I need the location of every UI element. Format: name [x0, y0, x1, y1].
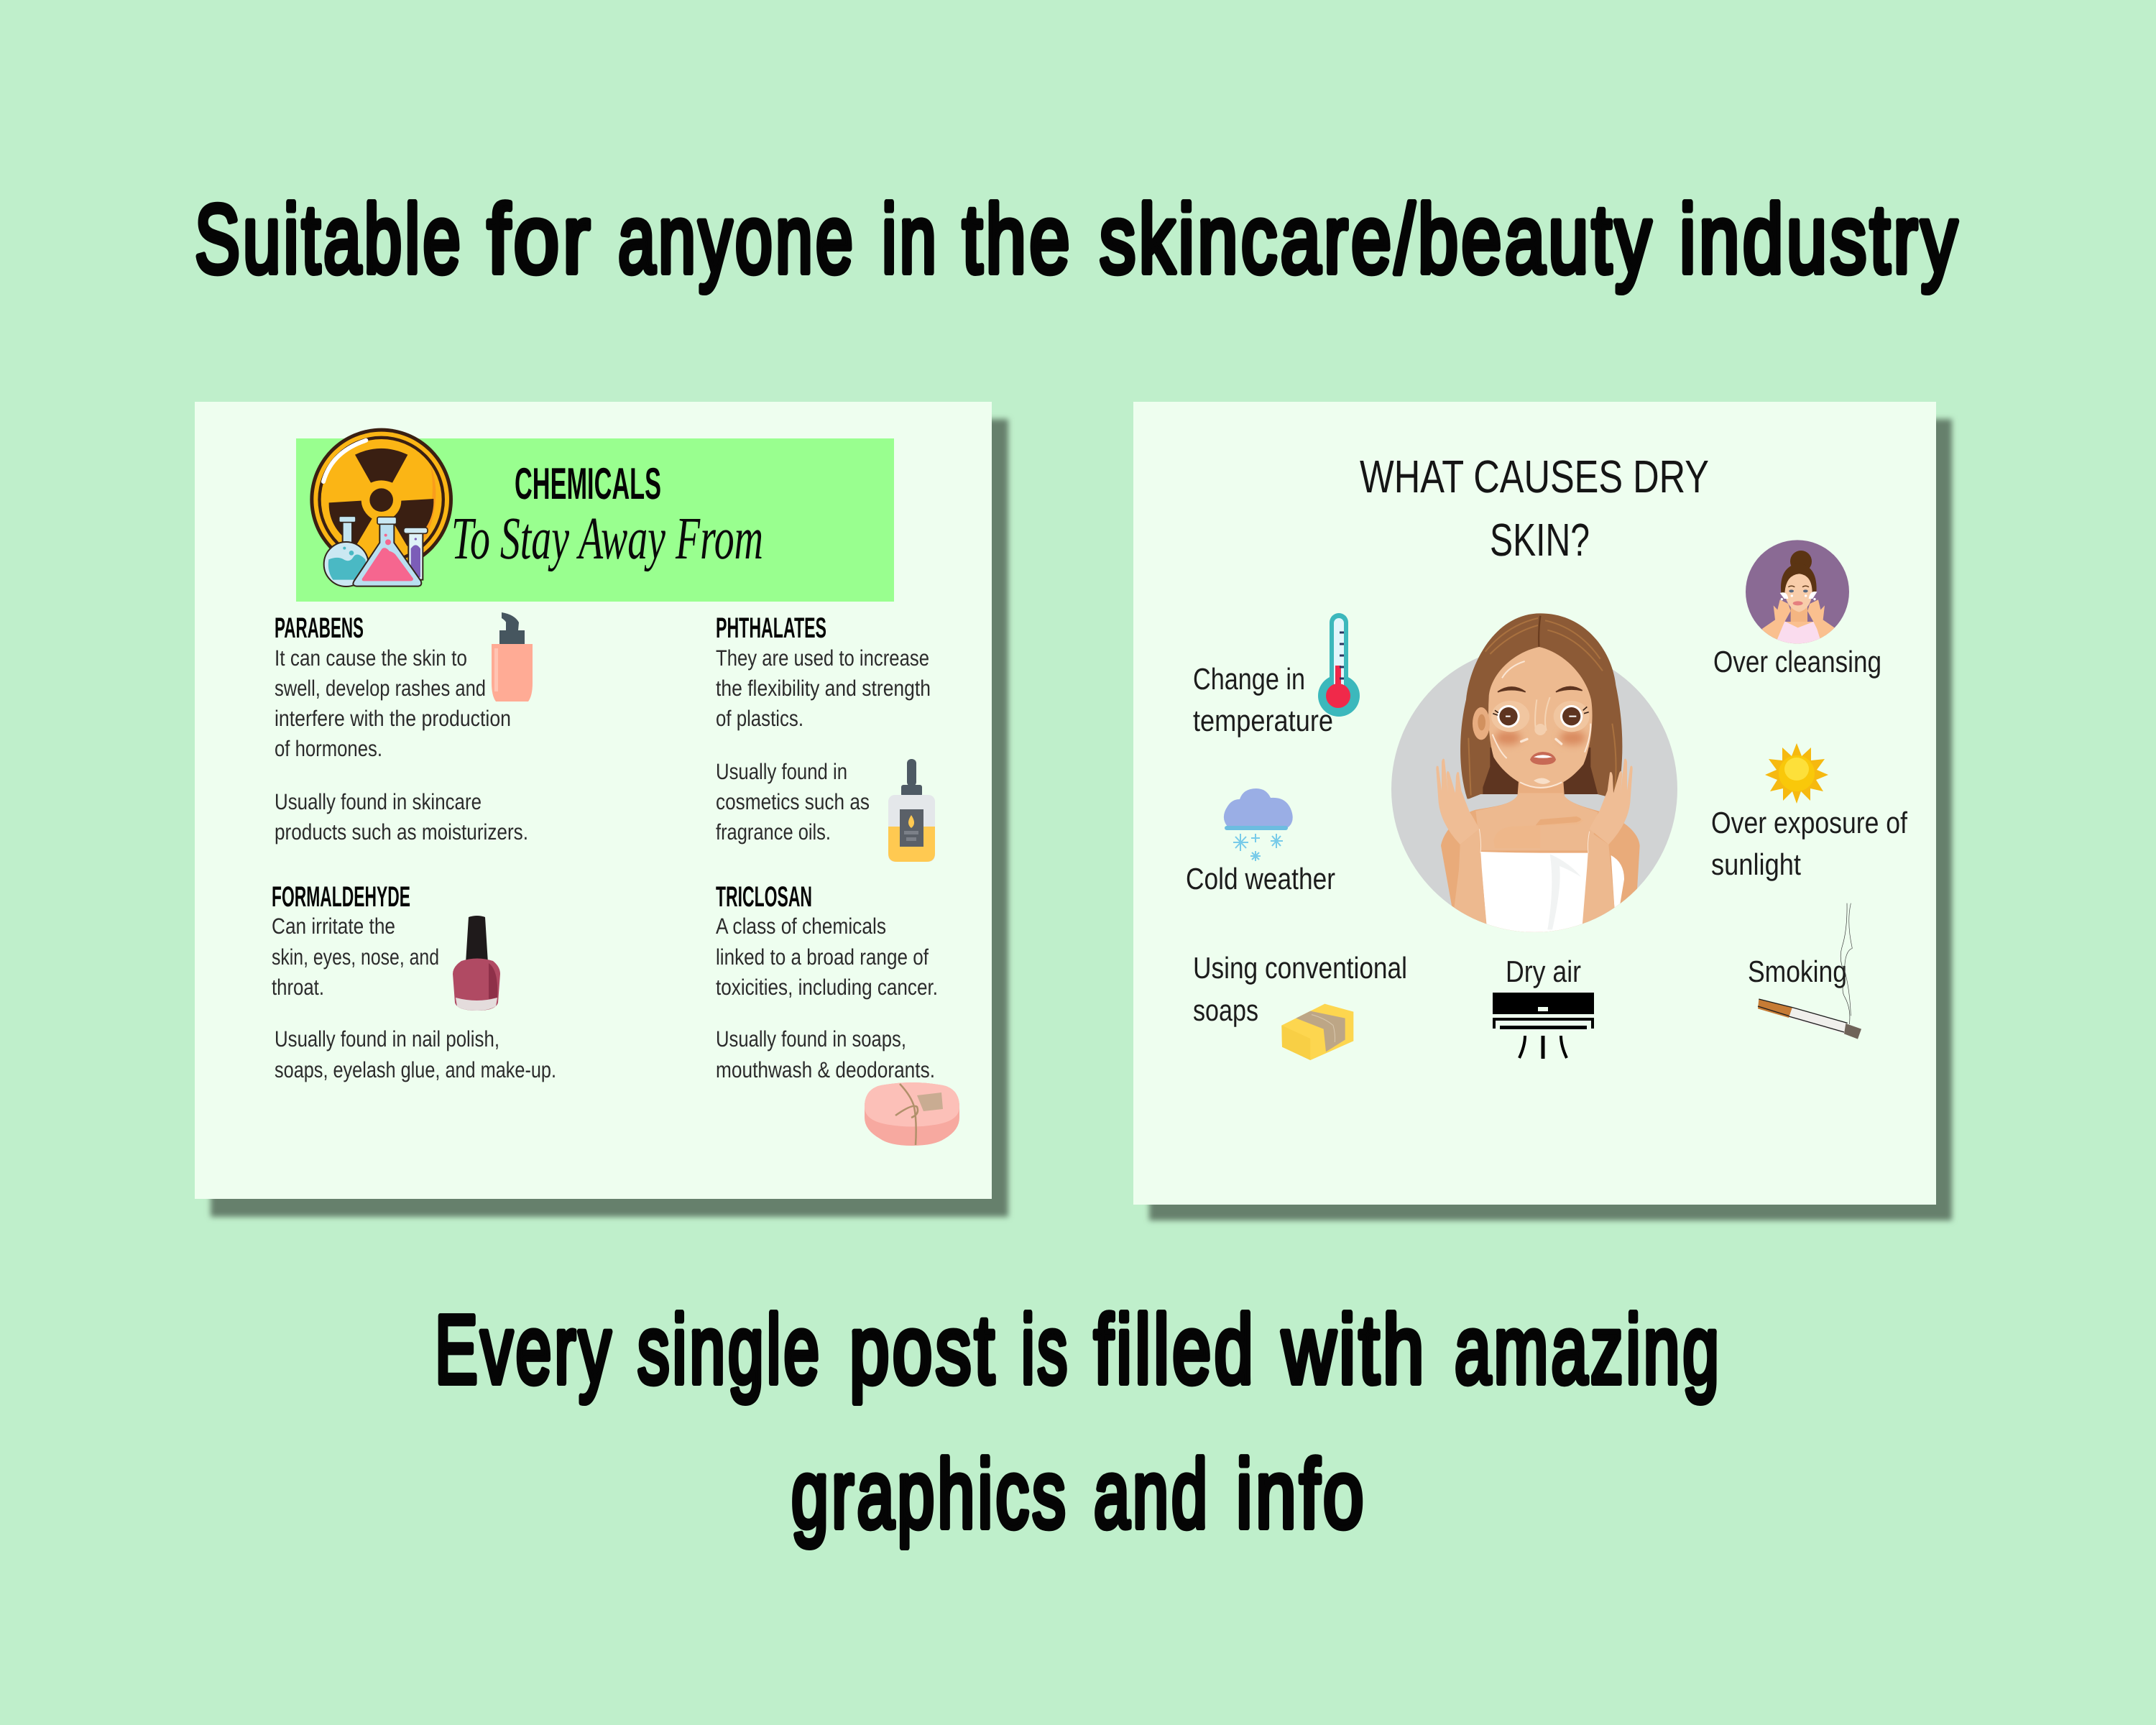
- label with icon: using conventional soaps: Using conventional: [1193, 951, 1407, 985]
- bottom heading: post: [849, 1295, 998, 1404]
- label with icon: smoking: Smoking: [1748, 954, 1847, 988]
- icon: sun: [1765, 743, 1828, 804]
- banner: chemicals title: [296, 438, 894, 602]
- text block: formaldehyde: Can irritate the: [272, 914, 395, 939]
- label with icon: over cleansing: [1713, 540, 1881, 678]
- label with icon: cold weather: Cold weather: [1186, 862, 1335, 896]
- icon: woman cleansing face: [1746, 540, 1849, 645]
- top heading: Suitable: [195, 185, 464, 293]
- icon: nail polish: [453, 916, 500, 1011]
- banner: chemicals title: To Stay Away From: [451, 505, 763, 572]
- text block: triclosan: Usually found in soaps,: [716, 1026, 906, 1052]
- text block: formaldehyde: throat.: [272, 975, 324, 1000]
- label with icon: change in temperature: Change in: [1193, 662, 1305, 696]
- text block: parabens: products such as moisturizers.: [275, 819, 528, 845]
- top heading: [195, 185, 1961, 293]
- bottom heading: is: [1021, 1295, 1070, 1404]
- text block: triclosan: A class of chemicals: [716, 914, 886, 939]
- top heading: the: [962, 185, 1073, 293]
- top heading: for: [487, 185, 594, 293]
- bottom heading: amazing: [1455, 1295, 1722, 1404]
- icon: cigarette with smoke: [1758, 903, 1861, 1039]
- icon: dropper bottle: [888, 759, 935, 862]
- panel: what causes dry skin: [1133, 402, 1952, 1220]
- bottom heading: info: [1236, 1440, 1367, 1548]
- label with icon: over exposure of sunlight: Over exposure of: [1711, 806, 1907, 840]
- text block: phthalates: Usually found in: [716, 759, 847, 784]
- icon: thermometer: [1318, 613, 1360, 717]
- label with icon: change in temperature: [1193, 613, 1360, 737]
- top heading: industry: [1680, 185, 1961, 293]
- label with icon: dry air: [1493, 954, 1594, 1059]
- text block: triclosan: [716, 881, 938, 1082]
- bottom heading: single: [637, 1295, 822, 1404]
- icon: pump bottle: [492, 612, 533, 702]
- text block: phthalates: They are used to increase: [716, 645, 929, 671]
- label with icon: dry air: Dry air: [1506, 954, 1581, 988]
- icon: pink soap with tag: [865, 1082, 959, 1146]
- panel title: [1360, 451, 1709, 566]
- label with icon: cold weather: [1186, 788, 1335, 896]
- icon: air conditioner: [1493, 993, 1594, 1059]
- text block: formaldehyde: [272, 881, 556, 1082]
- icon: snow cloud: [1224, 788, 1293, 861]
- text block: phthalates: cosmetics such as: [716, 789, 870, 814]
- text block: formaldehyde: Usually found in nail polish,: [275, 1026, 499, 1052]
- text block: phthalates: the flexibility and strength: [716, 676, 931, 701]
- label with icon: change in temperature: temperature: [1193, 704, 1333, 737]
- top heading: in: [882, 185, 939, 293]
- bottom heading: and: [1094, 1440, 1210, 1548]
- illustration: woman with dry skin: [1391, 613, 1677, 939]
- text block: triclosan: linked to a broad range of: [716, 944, 929, 970]
- text block: formaldehyde: FORMALDEHYDE: [272, 881, 410, 913]
- bottom heading: [435, 1295, 1722, 1548]
- text block: triclosan: TRICLOSAN: [716, 881, 812, 913]
- text block: parabens: swell, develop rashes and: [275, 676, 486, 701]
- text block: parabens: Usually found in skincare: [275, 789, 482, 814]
- label with icon: over cleansing: Over cleansing: [1713, 645, 1881, 678]
- panel title: WHAT CAUSES DRY: [1360, 451, 1709, 502]
- bottom heading: with: [1281, 1295, 1427, 1404]
- panel: chemicals to stay away from: [195, 402, 1008, 1217]
- icon: yellow soap bar: [1281, 1004, 1353, 1060]
- banner: chemicals title: CHEMICALS: [515, 459, 661, 509]
- text block: phthalates: fragrance oils.: [716, 819, 831, 845]
- icon: radiation sign with flasks: [310, 428, 453, 586]
- text block: parabens: of hormones.: [275, 736, 382, 761]
- panel title: SKIN?: [1490, 514, 1590, 566]
- text block: triclosan: mouthwash & deodorants.: [716, 1057, 935, 1082]
- top heading: skincare/beauty: [1100, 185, 1654, 293]
- label with icon: using conventional soaps: [1193, 951, 1407, 1060]
- text block: parabens: PARABENS: [275, 612, 364, 644]
- text block: parabens: It can cause the skin to: [275, 645, 467, 671]
- text block: phthalates: PHTHALATES: [716, 612, 826, 644]
- label with icon: over exposure of sunlight: sunlight: [1711, 847, 1801, 881]
- top heading: anyone: [618, 185, 856, 293]
- label with icon: smoking: [1748, 903, 1861, 1039]
- text block: parabens: interfere with the production: [275, 706, 511, 731]
- bottom heading: filled: [1094, 1295, 1256, 1404]
- text block: formaldehyde: soaps, eyelash glue, and make-up.: [275, 1057, 556, 1082]
- text block: triclosan: toxicities, including cancer.: [716, 975, 938, 1000]
- text block: phthalates: of plastics.: [716, 706, 803, 731]
- text block: formaldehyde: skin, eyes, nose, and: [272, 944, 439, 970]
- bottom heading: Every: [435, 1295, 614, 1404]
- text block: parabens: [275, 612, 528, 845]
- label with icon: using conventional soaps: soaps: [1193, 993, 1258, 1027]
- text block: phthalates: [716, 612, 931, 845]
- label with icon: over exposure of sunlight: [1711, 743, 1907, 881]
- bottom heading: graphics: [791, 1440, 1069, 1548]
